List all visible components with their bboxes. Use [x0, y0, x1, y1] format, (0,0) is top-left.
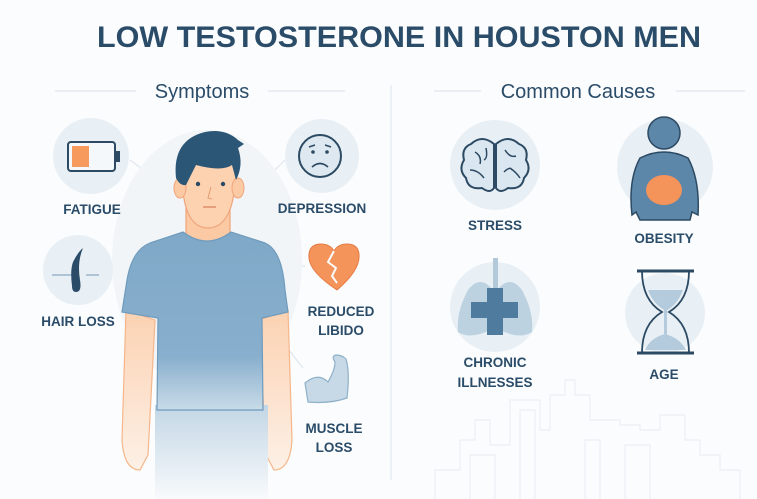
cause: stress	[450, 120, 540, 233]
head	[182, 152, 236, 228]
man figure	[112, 130, 302, 499]
title: LOW TESTOSTERONE IN HOUSTON MEN	[97, 21, 701, 54]
heading: symptoms: Symptoms	[155, 81, 249, 103]
symptom connector lines	[113, 160, 305, 368]
cause: obesity	[617, 117, 713, 246]
icon: hair follicle	[52, 274, 99, 276]
icon: lungs with cross	[458, 282, 493, 336]
arms	[122, 310, 155, 470]
cause: age: AGE	[649, 367, 679, 382]
icon: flexed arm	[305, 355, 348, 402]
icon: battery	[68, 142, 115, 171]
symptom: muscle loss: MUSCLE	[306, 421, 362, 436]
icon: sad face	[299, 135, 341, 177]
cause: chronic illnesses: CHRONIC	[464, 355, 527, 370]
symptom: muscle loss	[305, 355, 362, 455]
skyline	[435, 380, 740, 499]
symptom: fatigue: FATIGUE	[63, 202, 121, 217]
symptom: reduced libido: REDUCED	[308, 304, 375, 319]
symptom: depression	[278, 119, 366, 216]
cause: obesity: OBESITY	[634, 231, 694, 246]
icon: hourglass	[637, 271, 694, 353]
symptom: hair loss	[41, 235, 115, 329]
cause: chronic illnesses	[450, 258, 540, 390]
symptom: muscle loss: LOSS	[316, 440, 352, 455]
symptom: reduced libido	[308, 244, 375, 338]
pants	[155, 405, 268, 499]
hair	[176, 131, 244, 185]
cause: chronic illnesses: ILLNESSES	[457, 375, 533, 390]
cause: age	[625, 271, 705, 382]
icon: broken heart	[309, 244, 359, 290]
cause: stress: STRESS	[468, 218, 522, 233]
symptom: fatigue	[53, 118, 129, 217]
icon: obese body	[648, 117, 680, 149]
symptom: hair loss: HAIR LOSS	[41, 314, 115, 329]
symptom: reduced libido: LIBIDO	[318, 323, 364, 338]
symptom: depression: DEPRESSION	[278, 201, 366, 216]
icon: brain	[461, 139, 494, 191]
neck	[186, 205, 230, 242]
shirt	[122, 232, 288, 410]
heading: common causes: Common Causes	[501, 81, 655, 103]
